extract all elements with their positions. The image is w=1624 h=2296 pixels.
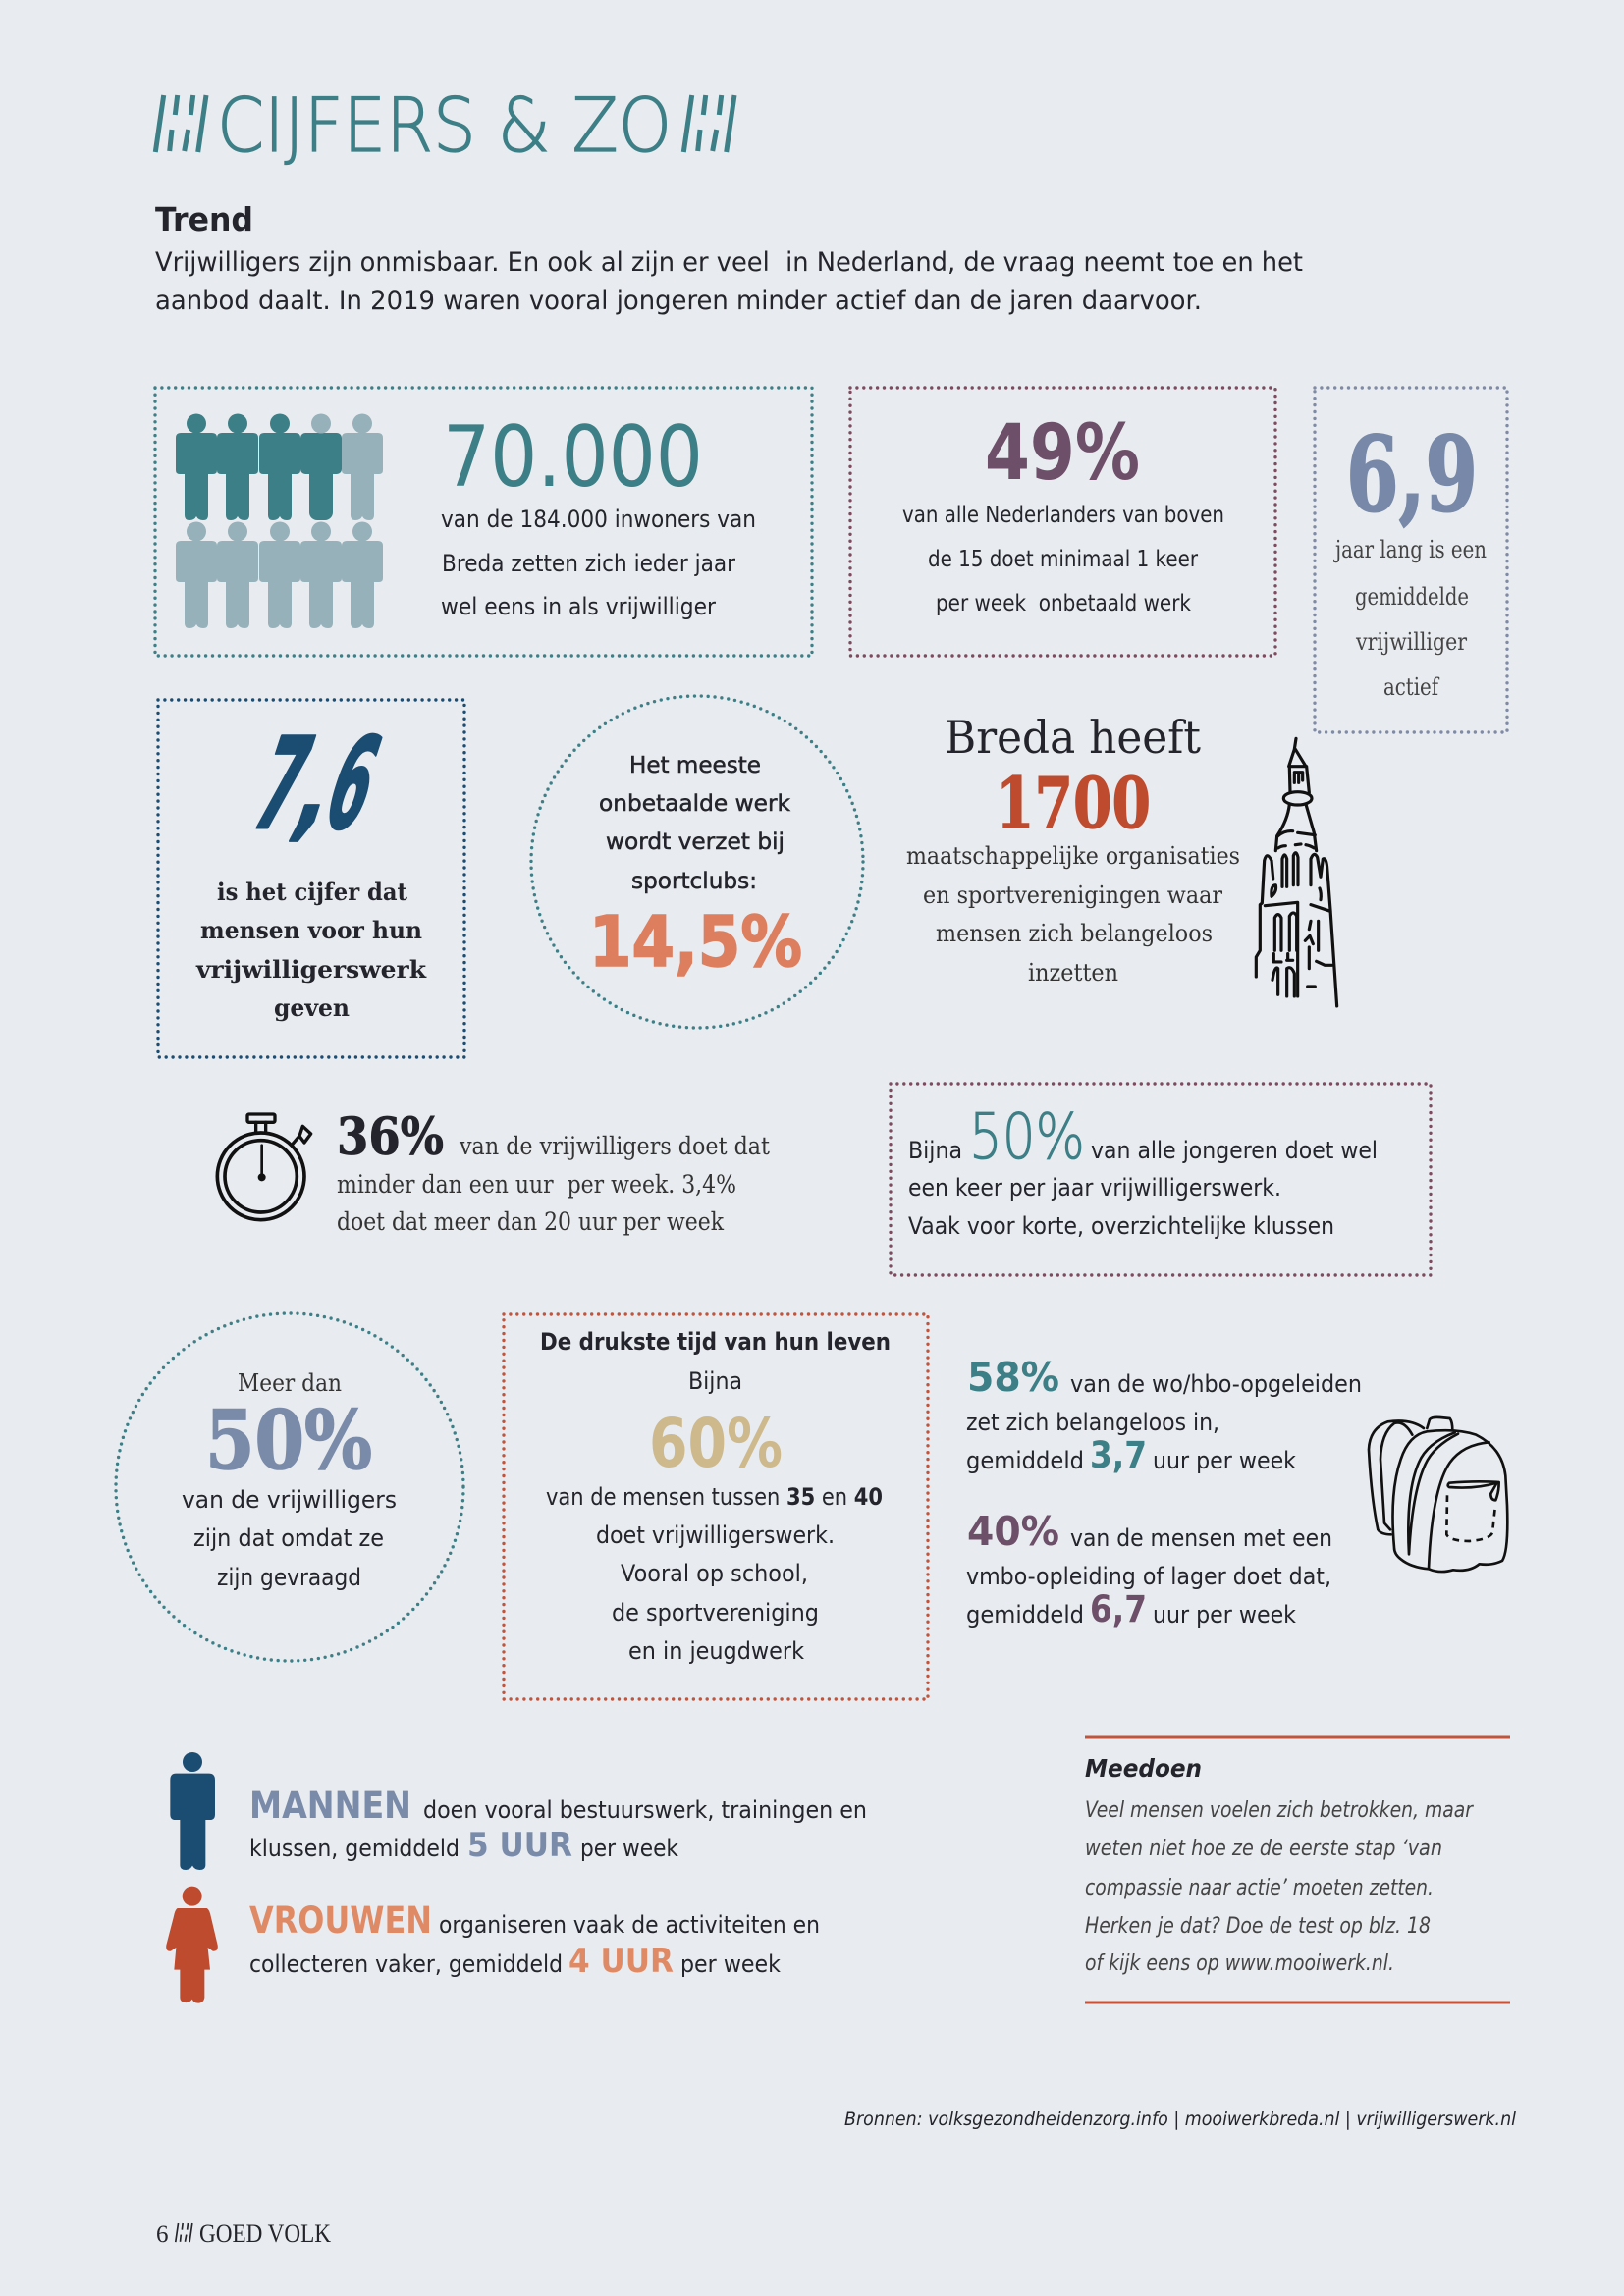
text: Bijna: Bijna bbox=[688, 1367, 742, 1395]
title: Cijfers & Zo bbox=[155, 81, 734, 169]
text: of kijk eens op www.mooiwerk.nl. bbox=[1085, 1951, 1394, 1976]
figure: 7,6: 7 bbox=[238, 711, 329, 857]
text: per week bbox=[680, 1950, 781, 1978]
text: hbo: zet zich belangeloos in, bbox=[966, 1409, 1219, 1436]
panel: sportclubs circle bbox=[531, 696, 863, 1028]
text: hbo: gemiddeld bbox=[966, 1447, 1084, 1474]
panel: mannen bbox=[170, 1752, 867, 1870]
text: van de 184.000 inwoners van bbox=[441, 506, 756, 533]
logo mark right bbox=[683, 95, 734, 152]
text: van de vrijwilligers doet dat bbox=[459, 1132, 770, 1160]
text: Meer dan: Meer dan bbox=[238, 1369, 342, 1397]
text: maatschappelijke organisaties bbox=[906, 842, 1240, 870]
icon: stopwatch bbox=[217, 1114, 311, 1220]
text: compassie naar actie’ moeten zetten. bbox=[1085, 1876, 1434, 1900]
figure: 7,6: , bbox=[282, 728, 352, 851]
text: jaar lang is een bbox=[1333, 536, 1487, 563]
title text: CIJFERS & ZO bbox=[217, 81, 672, 169]
text bbox=[908, 1137, 1378, 1240]
text bbox=[249, 1796, 867, 1862]
text: vrijwilliger bbox=[1355, 628, 1467, 656]
icon: backpack bbox=[1369, 1417, 1507, 1572]
figure: 70.000: 70.000 bbox=[443, 408, 703, 507]
text: geven bbox=[274, 993, 350, 1022]
heading: Breda heeft bbox=[945, 711, 1201, 764]
panel: 6,9 bbox=[1315, 388, 1507, 732]
text: collecteren vaker, gemiddeld bbox=[249, 1950, 563, 1978]
text: en in jeugdwerk bbox=[628, 1637, 804, 1665]
figure: 50%: 50% bbox=[205, 1394, 372, 1488]
panel: Meedoen bbox=[1085, 1737, 1510, 2002]
text: Veel mensen voelen zich betrokken, maar bbox=[1085, 1798, 1475, 1823]
panel: opleiding bbox=[966, 1354, 1507, 1630]
text: doen vooral bestuurswerk, trainingen en bbox=[423, 1796, 867, 1824]
text: vrijwilligerswerk bbox=[195, 955, 427, 984]
text: vmbo: van de mensen met een bbox=[1070, 1524, 1332, 1552]
text: hbo bbox=[966, 1370, 1362, 1474]
text bbox=[195, 878, 427, 1022]
heading: De drukste tijd van hun leven bbox=[540, 1328, 891, 1356]
text: Vaak voor korte, overzichtelijke klussen bbox=[908, 1212, 1334, 1240]
intro: Trend bbox=[155, 200, 1303, 316]
figure: 7,6: 6 bbox=[309, 711, 397, 857]
text: Het meeste bbox=[629, 753, 761, 778]
text: vmbo: uur per week bbox=[1153, 1601, 1296, 1629]
figure: 3,7: 3,7 bbox=[1090, 1434, 1147, 1476]
panel: jongeren 50% bbox=[891, 1084, 1431, 1275]
page number: 6 bbox=[156, 2221, 169, 2248]
text: vmbo: vmbo-opleiding of lager doet dat, bbox=[966, 1563, 1331, 1590]
text: hbo: van de wo/hbo-opgeleiden bbox=[1070, 1370, 1362, 1398]
text: de 15 doet minimaal 1 keer bbox=[928, 547, 1198, 572]
panel: 7,6 bbox=[158, 700, 464, 1057]
heading: Meedoen bbox=[1085, 1754, 1202, 1783]
text bbox=[906, 842, 1240, 987]
magazine name: GOED VOLK bbox=[199, 2219, 331, 2248]
text: van alle jongeren doet wel bbox=[1091, 1137, 1378, 1164]
figure: 60%: 60% bbox=[649, 1405, 783, 1483]
text: vmbo bbox=[966, 1524, 1332, 1629]
text: onbetaalde werk bbox=[599, 791, 791, 817]
text: minder dan een uur per week. 3,4% bbox=[337, 1170, 736, 1199]
text: mensen voor hun bbox=[200, 916, 422, 944]
label: VROUWEN: VROUWEN bbox=[249, 1899, 432, 1942]
text: per week bbox=[580, 1835, 678, 1862]
text: actief bbox=[1383, 673, 1440, 701]
logo mark left bbox=[155, 95, 206, 152]
icon: man bbox=[170, 1752, 215, 1870]
text: Herken je dat? Doe de test op blz. 18 bbox=[1085, 1914, 1431, 1939]
figure: 36%: 36% bbox=[337, 1107, 444, 1167]
text bbox=[1333, 536, 1487, 701]
panel: 70.000 bbox=[155, 388, 812, 656]
sources: Bronnen: volksgezondheidenzorg.info | mooiwerkbreda.nl | vrijwilligerswerk.nl bbox=[844, 2109, 1517, 2130]
footer bbox=[156, 2219, 331, 2248]
text: een keer per jaar vrijwilligerswerk. bbox=[908, 1174, 1281, 1201]
icon: church tower bbox=[1256, 738, 1337, 1006]
text: klussen, gemiddeld bbox=[249, 1835, 460, 1862]
figure: 58%: 58% bbox=[967, 1354, 1059, 1401]
text bbox=[182, 1486, 397, 1591]
text: Breda zetten zich ieder jaar bbox=[442, 550, 735, 577]
text: doet dat meer dan 20 uur per week bbox=[337, 1207, 725, 1236]
panel: drukste tijd bbox=[504, 1314, 928, 1699]
text bbox=[546, 1483, 883, 1665]
text: weten niet hoe ze de eerste stap ‘van bbox=[1085, 1837, 1442, 1861]
label: MANNEN: MANNEN bbox=[249, 1785, 411, 1827]
text: zijn gevraagd bbox=[217, 1564, 361, 1591]
text: van de mensen tussen 35 en 40 bbox=[546, 1483, 883, 1511]
icon: woman bbox=[166, 1887, 218, 2003]
figure: 6,7: 6,7 bbox=[1090, 1588, 1147, 1630]
figure: 5 UUR: 5 UUR bbox=[467, 1826, 572, 1865]
text: per week onbetaald werk bbox=[936, 591, 1192, 616]
text bbox=[441, 506, 756, 620]
text: hbo: uur per week bbox=[1153, 1447, 1296, 1474]
text bbox=[902, 503, 1224, 616]
text: gemiddelde bbox=[1355, 583, 1469, 611]
figure: 14,5%: 14,5% bbox=[589, 901, 802, 983]
text: vmbo: gemiddeld bbox=[966, 1601, 1084, 1629]
text bbox=[599, 753, 791, 894]
figure: 40%: 40% bbox=[967, 1508, 1059, 1555]
intro text: Vrijwilligers zijn onmisbaar. En ook al zijn er veel in Nederland, de vraag neemt toe en het bbox=[155, 247, 1303, 278]
text: organiseren vaak de activiteiten en bbox=[439, 1911, 820, 1939]
icon: people grid bbox=[176, 414, 383, 628]
text: wel eens in als vrijwilliger bbox=[441, 593, 716, 620]
text: is het cijfer dat bbox=[217, 878, 407, 906]
text: inzetten bbox=[1028, 959, 1118, 987]
panel: Breda 1700 bbox=[906, 711, 1337, 1006]
text: wordt verzet bij bbox=[606, 829, 785, 855]
text: Bijna: Bijna bbox=[908, 1137, 962, 1164]
text: de sportvereniging bbox=[612, 1599, 819, 1627]
figure: 6,9: 6,9 bbox=[1346, 413, 1478, 535]
text: sportclubs: bbox=[631, 869, 757, 894]
panel: 49% bbox=[850, 388, 1275, 656]
logo mark small bbox=[176, 2223, 192, 2242]
text: en sportverenigingen waar bbox=[923, 881, 1222, 909]
panel: vrouwen bbox=[166, 1887, 820, 2003]
intro text bbox=[155, 247, 1303, 316]
text: zijn dat omdat ze bbox=[193, 1524, 384, 1552]
figure: 4 UUR: 4 UUR bbox=[568, 1942, 674, 1981]
heading: Trend bbox=[155, 200, 253, 239]
figure: 49%: 49% bbox=[985, 409, 1140, 498]
text: doet vrijwilligerswerk. bbox=[596, 1522, 835, 1549]
figure: 1700: 1700 bbox=[996, 762, 1151, 844]
text: mensen zich belangeloos bbox=[936, 920, 1213, 947]
figure: 50%: 50% bbox=[969, 1101, 1085, 1174]
text: van alle Nederlanders van boven bbox=[902, 503, 1224, 528]
text: Vooral op school, bbox=[621, 1560, 808, 1587]
text bbox=[249, 1911, 820, 1978]
panel: gevraagd circle bbox=[116, 1313, 463, 1661]
text bbox=[1085, 1798, 1475, 1976]
panel: 36% stopwatch bbox=[217, 1107, 770, 1236]
text: van de vrijwilligers bbox=[182, 1486, 397, 1514]
intro text: aanbod daalt. In 2019 waren vooral jongeren minder actief dan de jaren daarvoor. bbox=[155, 286, 1202, 316]
text bbox=[337, 1132, 770, 1236]
